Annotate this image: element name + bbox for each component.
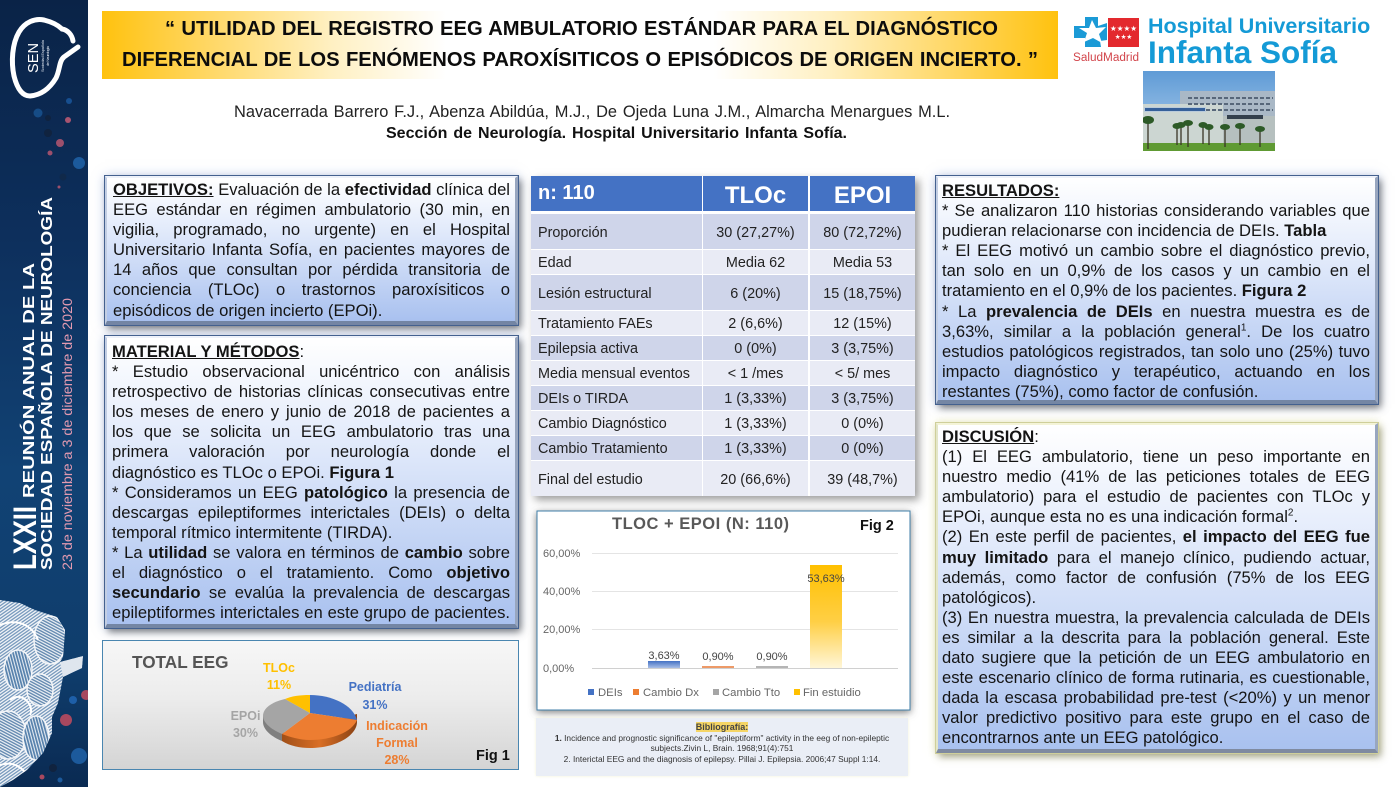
pie label: TLOc: TLOc (263, 661, 295, 675)
bar: Cambio Tto (756, 651, 788, 668)
icon: SEN logo: de Neurología (45, 45, 50, 66)
table row: Tratamiento FAEs (531, 311, 915, 335)
table row: Cambio Tratamiento: 0 (0%) (841, 441, 884, 457)
discusión text: muy limitado para el manejo clínico, pudiendo actuar, (942, 548, 1370, 567)
objetivos text: 14 años que consultan por pérdida transitoria de (113, 260, 510, 279)
pie label: Pediatría: Pediatría (349, 680, 401, 694)
table row: Cambio Diagnóstico: Cambio Diagnóstico (538, 416, 667, 432)
title banner: DIFERENCIAL DE LOS FENÓMENOS PAROXÍSITICOS O EPISÓDICOS DE ORIGEN INCIERTO. ” (122, 49, 1038, 71)
table: results by group (531, 176, 915, 496)
pie label: Indicación Formal (366, 719, 428, 767)
discusión text: (3) En nuestra muestra, la prevalencia calculada de DEIs (942, 608, 1370, 627)
table row: Lesión estructural: 15 (18,75%) (823, 286, 902, 302)
table row: Media mensual eventos: Media mensual eventos (538, 366, 690, 382)
discusión text: ambulatorio) para el estudio de pacientes con TLOc y (942, 487, 1370, 506)
pie label: Pediatría: 31% (362, 698, 388, 712)
icon: brain illustration (0, 600, 83, 787)
discusión text: dada la escasa probabilidad pre-test (<20%) y un menor (942, 688, 1370, 707)
material y métodos text: * Consideramos un EEG patológico la presencia de (112, 483, 510, 502)
table row: DEIs o TIRDA: 1 (3,33%) (724, 391, 787, 407)
objetivos text: conciencia (TLOc) o trastornos paroxísiticos o (113, 280, 510, 299)
objetivos text (113, 180, 510, 320)
table row: Cambio Tratamiento: 1 (3,33%) (724, 441, 787, 457)
bar: DEIs: 3,63% (648, 650, 680, 662)
figure 1 label: Fig 1 (476, 748, 510, 764)
legend: Fin estuidio (803, 687, 861, 699)
resultados text (942, 181, 1370, 401)
material y métodos text: MATERIAL Y MÉTODOS: (112, 342, 304, 361)
material y métodos text: los que se solicita un EEG ambulatorio tras una (112, 422, 510, 441)
logo: Hospital Universitario Infanta Sofía: Infanta Sofía (1148, 34, 1337, 70)
discusión text: patológicos). (942, 588, 1036, 607)
material y métodos text: * La utilidad se valora en términos de cambio sobre (112, 543, 510, 562)
material y métodos text: retrospectivo de historias clínicas consecutivas entre (112, 382, 510, 401)
sidebar: congress banner (0, 0, 88, 787)
discusión text: es similar a la descrita para la población general. Este (942, 628, 1370, 647)
title banner: “ UTILIDAD DEL REGISTRO EEG AMBULATORIO ESTÁNDAR PARA EL DIAGNÓSTICO (165, 18, 998, 40)
bar: Cambio Dx (702, 651, 734, 668)
table row: Lesión estructural: 6 (20%) (730, 286, 781, 302)
pie chart (263, 695, 357, 748)
pie label: EPOi: 30% (233, 726, 258, 740)
bibliography (536, 718, 908, 776)
figure 2 label: Fig 2 (860, 518, 894, 534)
table row: Final del estudio (531, 461, 915, 496)
y axis and gridlines (543, 548, 898, 675)
pie chart title: TOTAL EEG (132, 652, 228, 672)
table row: Cambio Diagnóstico: 0 (0%) (841, 416, 884, 432)
panel: objetivos (105, 176, 518, 325)
legend: Cambio Tto (722, 687, 780, 699)
discusión text: además, como factor de confusión (75% de los EEG (942, 568, 1370, 587)
table row: Proporción: 30 (27,27%) (716, 224, 795, 240)
material y métodos text: temporal rítmico intermitente (TIRDA). (112, 523, 392, 542)
table row: Edad: Media 53 (833, 255, 892, 271)
resultados text: estudios patológicos registrados, tan solo uno (25%) tuvo (942, 342, 1370, 361)
pie label: Pediatría (349, 680, 402, 712)
table row: Edad (531, 250, 915, 274)
material y métodos text: los meses de enero y junio de 2018 de pacientes a (112, 402, 510, 421)
pie label: TLOc (263, 661, 295, 692)
legend: DEIs (598, 687, 623, 699)
bibliography: subjects.Zivin L, Brain. 1968;91(4):751 (651, 743, 793, 753)
table header (531, 176, 915, 211)
table row: Cambio Tratamiento: Cambio Tratamiento (538, 441, 668, 457)
pie label: Indicación Formal: Formal (376, 736, 418, 750)
authors: Sección de Neurología. Hospital Universitario Infanta Sofía. (386, 125, 847, 142)
logo: SaludMadrid: ★★★ (1115, 33, 1132, 41)
resultados text: impacto diagnóstico y terapéutico, actuando en los (942, 362, 1370, 381)
discusión text: (2) En este perfil de pacientes, el impacto del EEG fue (942, 527, 1370, 546)
resultados text: tan solo en un 0,9% de los casos y un cambio en el (942, 261, 1370, 280)
discusión text: EPOi, aunque esta no es una indicación formal2. (942, 507, 1298, 526)
material y métodos text: primera valoración por neurología donde el (112, 442, 510, 461)
table row: Media mensual eventos (531, 361, 915, 385)
material y métodos text: secundario se evalúa la prevalencia de descargas (112, 583, 510, 602)
table row: Epilepsia activa: 0 (0%) (734, 341, 777, 357)
authors (234, 103, 950, 142)
resultados text: * El EEG motivó un cambio sobre el diagnóstico previo, (942, 241, 1370, 260)
table row: Tratamiento FAEs: 2 (6,6%) (728, 316, 783, 332)
chart title: TLOC + EPOI (N: 110) (612, 515, 789, 533)
table row: Proporción: 80 (72,72%) (823, 224, 902, 240)
logo: SaludMadrid: ★★★★ (1110, 24, 1137, 33)
pie label: EPOi (231, 709, 260, 740)
logo: Hospital Universitario Infanta Sofía (1148, 14, 1370, 70)
resultados text: pudieran relacionarse con incidencia de DEIs. Tabla (942, 221, 1326, 240)
discusión text: este escenario clínico de forma rutinaria, es cuestionable, (942, 668, 1370, 687)
logo: SaludMadrid (1073, 17, 1139, 64)
bibliography: 1. Incidence and prognostic significance of "epileptiform" activity in the eeg of non-epileptic (555, 732, 889, 742)
table row: Cambio Diagnóstico (531, 411, 915, 435)
table row: Epilepsia activa (531, 336, 915, 360)
table row: Epilepsia activa: Epilepsia activa (538, 341, 638, 357)
congress title: LXXII (7, 506, 43, 570)
material y métodos text: * Estudio observacional unicéntrico con análisis (112, 362, 510, 381)
objetivos text: Universitario Infanta Sofía, en pacientes mayores de (113, 240, 510, 259)
resultados text: * La prevalencia de DEIs en nuestra muestra es de (942, 302, 1370, 321)
bar: Cambio Dx: 0,90% (702, 651, 734, 663)
table header: EPOI (834, 182, 891, 208)
bar: Fin estudio: 53,63% (807, 573, 845, 585)
icon: SEN logo (12, 20, 78, 96)
table header: TLOc (725, 182, 786, 208)
table row: Epilepsia activa: 3 (3,75%) (831, 341, 894, 357)
panel: material y métodos (105, 336, 518, 628)
bar: Fin estudio (807, 565, 845, 668)
pie label: Indicación Formal: 28% (384, 753, 410, 767)
resultados text: * Se analizaron 110 historias considerando variables que (942, 201, 1370, 220)
table row: Cambio Diagnóstico: 1 (3,33%) (724, 416, 787, 432)
y axis and gridlines: 20,00% (543, 624, 581, 636)
y axis and gridlines: 60,00% (543, 548, 581, 560)
logo: SaludMadrid: SaludMadrid (1073, 52, 1139, 64)
material y métodos text (112, 342, 510, 622)
pie label: TLOc: 11% (267, 678, 291, 692)
table row: Lesión estructural: Lesión estructural (538, 286, 652, 302)
resultados text: restantes (75%), como factor de confusión. (942, 382, 1258, 401)
discusión text: dato sugiere que la petición de un EEG ambulatorio en (942, 648, 1370, 667)
discusión text: nuestro medio (41% de las peticiones totales de EEG (942, 467, 1370, 486)
authors: Navacerrada Barrero F.J., Abenza Abildúa, M.J., De Ojeda Luna J.M., Almarcha Menargues M.L. (234, 103, 950, 121)
resultados text: RESULTADOS: (942, 181, 1059, 200)
y axis and gridlines: 0,00% (543, 663, 574, 675)
panel: figure 2 bar chart (530, 506, 916, 718)
congress title: 23 de noviembre a 3 de diciembre de 2020 (59, 298, 75, 570)
panel: discusión (936, 423, 1378, 753)
bar: DEIs (648, 650, 680, 668)
table row: DEIs o TIRDA: 3 (3,75%) (831, 391, 894, 407)
table row: Proporción: Proporción (538, 224, 608, 240)
y axis and gridlines: 40,00% (543, 586, 581, 598)
table row: Tratamiento FAEs: 12 (15%) (833, 316, 892, 332)
table row: Proporción (531, 214, 915, 249)
objetivos text: OBJETIVOS: Evaluación de la efectividad clínica del (113, 180, 510, 199)
material y métodos text: el diagnóstico o el tratamiento. Como objetivo (112, 563, 510, 582)
bar: Cambio Tto: 0,90% (756, 651, 788, 663)
decorative dots (34, 98, 91, 782)
congress title: SOCIEDAD ESPAÑOLA DE NEUROLOGÍA (36, 196, 56, 570)
discusión text: encontrarnos ante un EEG patológico. (942, 728, 1223, 747)
title banner (102, 11, 1058, 79)
panel: resultados (936, 176, 1378, 404)
table row: Media mensual eventos: < 5/ mes (835, 366, 890, 382)
table row: Tratamiento FAEs: Tratamiento FAEs (538, 316, 653, 332)
objetivos text: EEG estándar en régimen ambulatorio (30 min, en (113, 200, 510, 219)
discusión text: valor predictivo positivo para este grupo en el caso de (942, 708, 1370, 727)
table row: DEIs o TIRDA (531, 386, 915, 410)
table row: Final del estudio: 39 (48,7%) (827, 472, 898, 488)
congress title (7, 196, 75, 570)
legend (588, 687, 861, 699)
objetivos text: vigilia, programado, no urgente) en el Hospital (113, 220, 510, 239)
discusión text (942, 427, 1370, 747)
table row: Edad: Media 62 (726, 255, 785, 271)
resultados text: tratamiento en el 0,9% de los pacientes. Figura 2 (942, 281, 1306, 300)
table row: Lesión estructural (531, 275, 915, 310)
pie label: EPOi: EPOi (231, 709, 260, 723)
resultados text: 3,63%, similar a la población general1. De los cuatro (942, 322, 1370, 341)
objetivos text: episódicos de origen incierto (EPOi). (113, 301, 382, 320)
table row: DEIs o TIRDA: DEIs o TIRDA (538, 391, 628, 407)
table row: Cambio Tratamiento (531, 436, 915, 460)
material y métodos text: diagnóstico es TLOc o EPOi. Figura 1 (112, 463, 394, 482)
table row: Edad: Edad (538, 255, 572, 271)
logo: Hospital Universitario Infanta Sofía: Hospital Universitario (1148, 14, 1370, 38)
congress title: REUNIÓN ANUAL DE LA (19, 262, 38, 498)
bibliography: Bibliografía: (696, 722, 748, 732)
table row: Media mensual eventos: < 1 /mes (728, 366, 783, 382)
legend: Cambio Dx (643, 687, 699, 699)
bibliography: 2. Interictal EEG and the diagnosis of epilepsy. Pillai J. Epilepsia. 2006;47 Suppl 1:14. (564, 754, 880, 764)
material y métodos text: epileptiformes interictales en este grupo de pacientes. (112, 603, 510, 622)
icon: SEN logo: Sociedad Española (40, 39, 45, 72)
hospital photo (1143, 71, 1275, 151)
icon: SEN logo: SEN (26, 43, 42, 73)
table row: Final del estudio: Final del estudio (538, 472, 643, 488)
discusión text: (1) El EEG ambulatorio, tiene un peso importante en (942, 447, 1370, 466)
table header: n: 110 (538, 182, 595, 204)
pie label: Indicación Formal: Indicación (366, 719, 428, 733)
panel: figure 1 pie chart (102, 640, 519, 770)
table row: Final del estudio: 20 (66,6%) (720, 472, 791, 488)
material y métodos text: descargas epileptiformes interictales (DEIs) o delta (112, 503, 510, 522)
discusión text: DISCUSIÓN: (942, 427, 1039, 446)
